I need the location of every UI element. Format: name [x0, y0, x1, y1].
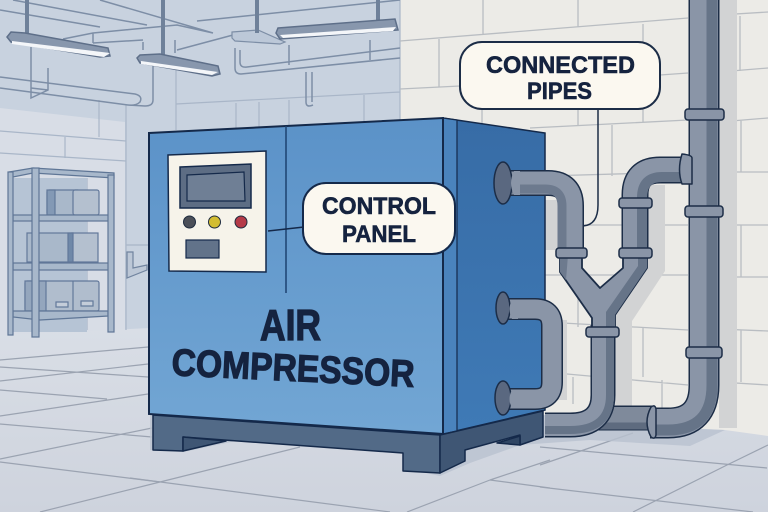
wall bricks right [400, 0, 768, 410]
pipes [505, 0, 712, 430]
callout: control panel: PANEL [342, 221, 416, 248]
background: floor [0, 328, 768, 512]
background: right wall [400, 0, 768, 440]
compressor label [171, 301, 415, 396]
box middle [27, 233, 98, 262]
compressor label: COMPRESSOR [171, 342, 415, 396]
pipe: Y joint [560, 255, 647, 330]
control panel [168, 151, 266, 272]
compressor side strip [443, 118, 457, 434]
pipe rings and couplers [510, 109, 724, 438]
box bottom [25, 281, 99, 311]
pipe: top outlet [508, 183, 571, 255]
small display [186, 240, 219, 258]
pipe wall shadows [552, 0, 728, 428]
pipe: lower loop [505, 309, 552, 399]
lamp 3 [255, 0, 398, 39]
background: lit corner wall [0, 108, 125, 340]
ceiling ducts [0, 0, 400, 106]
buttons [184, 216, 247, 228]
compressor base [153, 411, 543, 473]
pipe: tall vertical riser [650, 0, 712, 430]
callout: control panel: CONTROL [322, 193, 436, 220]
pipe: upper branch to riser [635, 154, 692, 255]
background: back wall [0, 0, 400, 340]
callout: connected pipes [460, 42, 660, 109]
shelf frame [8, 168, 114, 337]
callout: connected pipes: CONNECTED [486, 52, 635, 79]
leader: connected pipes [583, 109, 598, 226]
compressor side [443, 118, 545, 434]
pipe behind: lower horizontal [590, 418, 652, 426]
shelf with boxes [8, 168, 114, 337]
leader: control panel [268, 227, 304, 231]
wall hook pipe [127, 252, 147, 278]
display screen [180, 164, 251, 208]
ceiling duct box [232, 30, 285, 44]
callout: connected pipes: PIPES [527, 78, 592, 105]
box top [47, 190, 99, 215]
lamp 2 [137, 0, 220, 76]
lamp 1 [7, 0, 110, 57]
compressor front [149, 118, 443, 434]
pipe: long drain [545, 325, 610, 430]
flanges on compressor [494, 162, 512, 415]
floor tile lines [0, 347, 768, 512]
floor shadow [150, 410, 725, 476]
wall bricks left [0, 0, 400, 330]
callout: control panel [303, 183, 455, 254]
compressor label: AIR [260, 301, 321, 350]
